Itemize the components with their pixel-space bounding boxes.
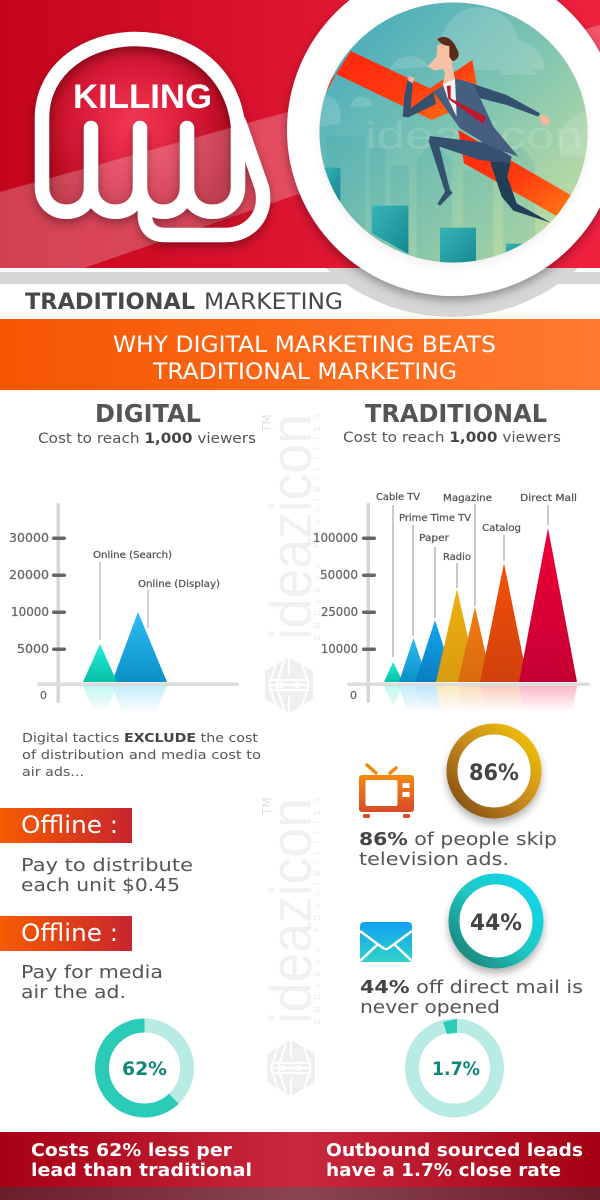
offline label 1 [0,808,132,843]
traditional heading: Cost to reach 1,000 viewers [343,430,561,446]
traditional axes: 0 [350,689,357,702]
traditional axes: 10000 [321,642,358,656]
footer text left: lead than traditional [31,1160,252,1181]
paragraph: digital tactics [22,731,261,779]
footer text right: have a 1.7% close rate [326,1160,561,1181]
paragraph: digital tactics: of distribution and media cost to [22,748,261,762]
donut: 1.7 percent: 1.7% [432,1058,480,1080]
traditional heading: TRADITIONAL [365,399,547,428]
footer text left: Costs 62% less per [31,1140,232,1161]
digital axes [9,503,239,703]
ring: 86 percent: 86% [469,761,519,786]
digital axes: 5000 [17,642,49,656]
fist icon with KILLING: KILLING [73,78,212,116]
grey swoosh under header [0,268,600,317]
text: 44 percent direct mail: never opened [360,997,500,1018]
city buildings [327,137,535,270]
teal bars [322,168,529,264]
traditional reflections [384,686,577,709]
text: 86 percent skip: television ads. [359,849,509,870]
digital axes: 0 [40,689,47,702]
donut: 62 percent [102,1026,187,1110]
orange banner heading: WHY DIGITAL MARKETING BEATS [113,333,496,358]
digital triangles [83,612,167,682]
digital leader labels: Online (Display) [138,579,220,590]
digital axes: 10000 [11,605,49,619]
traditional leader labels: Cable TV [376,492,421,503]
red arrow [327,51,571,216]
text: 86 percent skip [359,829,557,870]
offline text 1: each unit $0.45 [21,876,180,896]
watermark upper: TM [260,414,274,433]
traditional axes: 25000 [321,605,358,619]
header panel [0,0,600,268]
traditional bar chart [314,492,590,709]
digital axes: 20000 [9,568,49,582]
watermark upper: ENDLESS POSSIBILITIES [313,414,322,640]
digital reflections [83,686,167,708]
traditional axes: 50000 [320,568,358,582]
digital heading: Cost to reach 1,000 viewers [38,431,256,447]
traditional leader labels: Paper [419,533,449,544]
fist icon with KILLING [0,25,600,268]
digital bar chart [10,503,239,708]
traditional leader labels: Magazine [443,493,492,504]
traditional axes: 100000 [313,531,358,545]
ring: 44 percent [454,879,538,963]
watermark lower: TM [260,797,274,816]
digital axes: 30000 [9,531,49,545]
offline text 2: Pay for media [21,963,163,983]
businessman [403,37,551,223]
ring: 44 percent: 44% [470,911,522,936]
digital leader labels [93,550,220,640]
traditional heading [343,399,561,446]
text: 86 percent skip: 86% of people skip [359,829,557,850]
digital heading [38,399,256,447]
text: 44 percent direct mail: 44% off direct mail is [360,977,583,998]
donut: 62 percent: 62% [122,1058,167,1080]
offline label 2: Offline : [21,919,118,947]
traditional leader labels [376,492,577,657]
offline label 2 [0,916,132,951]
digital heading: DIGITAL [95,399,201,428]
digital leader labels: Online (Search) [93,550,172,561]
offline text 1: Pay to distribute [21,856,193,876]
orange banner heading [0,319,600,390]
watermark in illustration: ideazicon [365,114,583,157]
subtitle: traditional marketing: TRADITIONAL [25,290,195,315]
footer text left [31,1140,252,1181]
offline text 2 [21,963,163,1003]
icon: envelope [360,922,412,962]
subtitle: traditional marketing: MARKETING [204,290,343,315]
offline label 1: Offline : [21,811,118,839]
traditional leader labels: Prime Time TV [399,513,472,524]
watermark lower: ENDLESS POSSIBILITIES [313,798,322,1024]
orange banner heading: TRADITIONAL MARKETING [152,360,457,385]
traditional leader labels: Radio [443,552,471,563]
illustration medallion [287,0,600,296]
traditional triangles [384,528,577,682]
watermark lower: ideazicon [259,798,324,1024]
paragraph: digital tactics: Digital tactics EXCLUDE the cost [22,731,258,745]
donut: 1.7 percent [412,1019,497,1110]
watermark upper: ideazicon [259,414,324,640]
traditional leader labels: Catalog [482,523,521,534]
subtitle: traditional marketing [25,290,343,315]
footer text right: Outbound sourced leads [326,1140,583,1161]
footer band [0,1132,600,1200]
paragraph: digital tactics: air ads... [22,765,84,779]
ring: 86 percent [452,729,536,813]
footer text right [326,1140,583,1181]
traditional axes [313,503,590,703]
icon: television [359,764,414,818]
text: 44 percent direct mail [360,977,583,1018]
traditional leader labels: Direct Mall [520,493,577,504]
clouds [320,7,590,157]
offline text 2: air the ad. [21,983,126,1003]
offline text 1 [21,856,193,896]
